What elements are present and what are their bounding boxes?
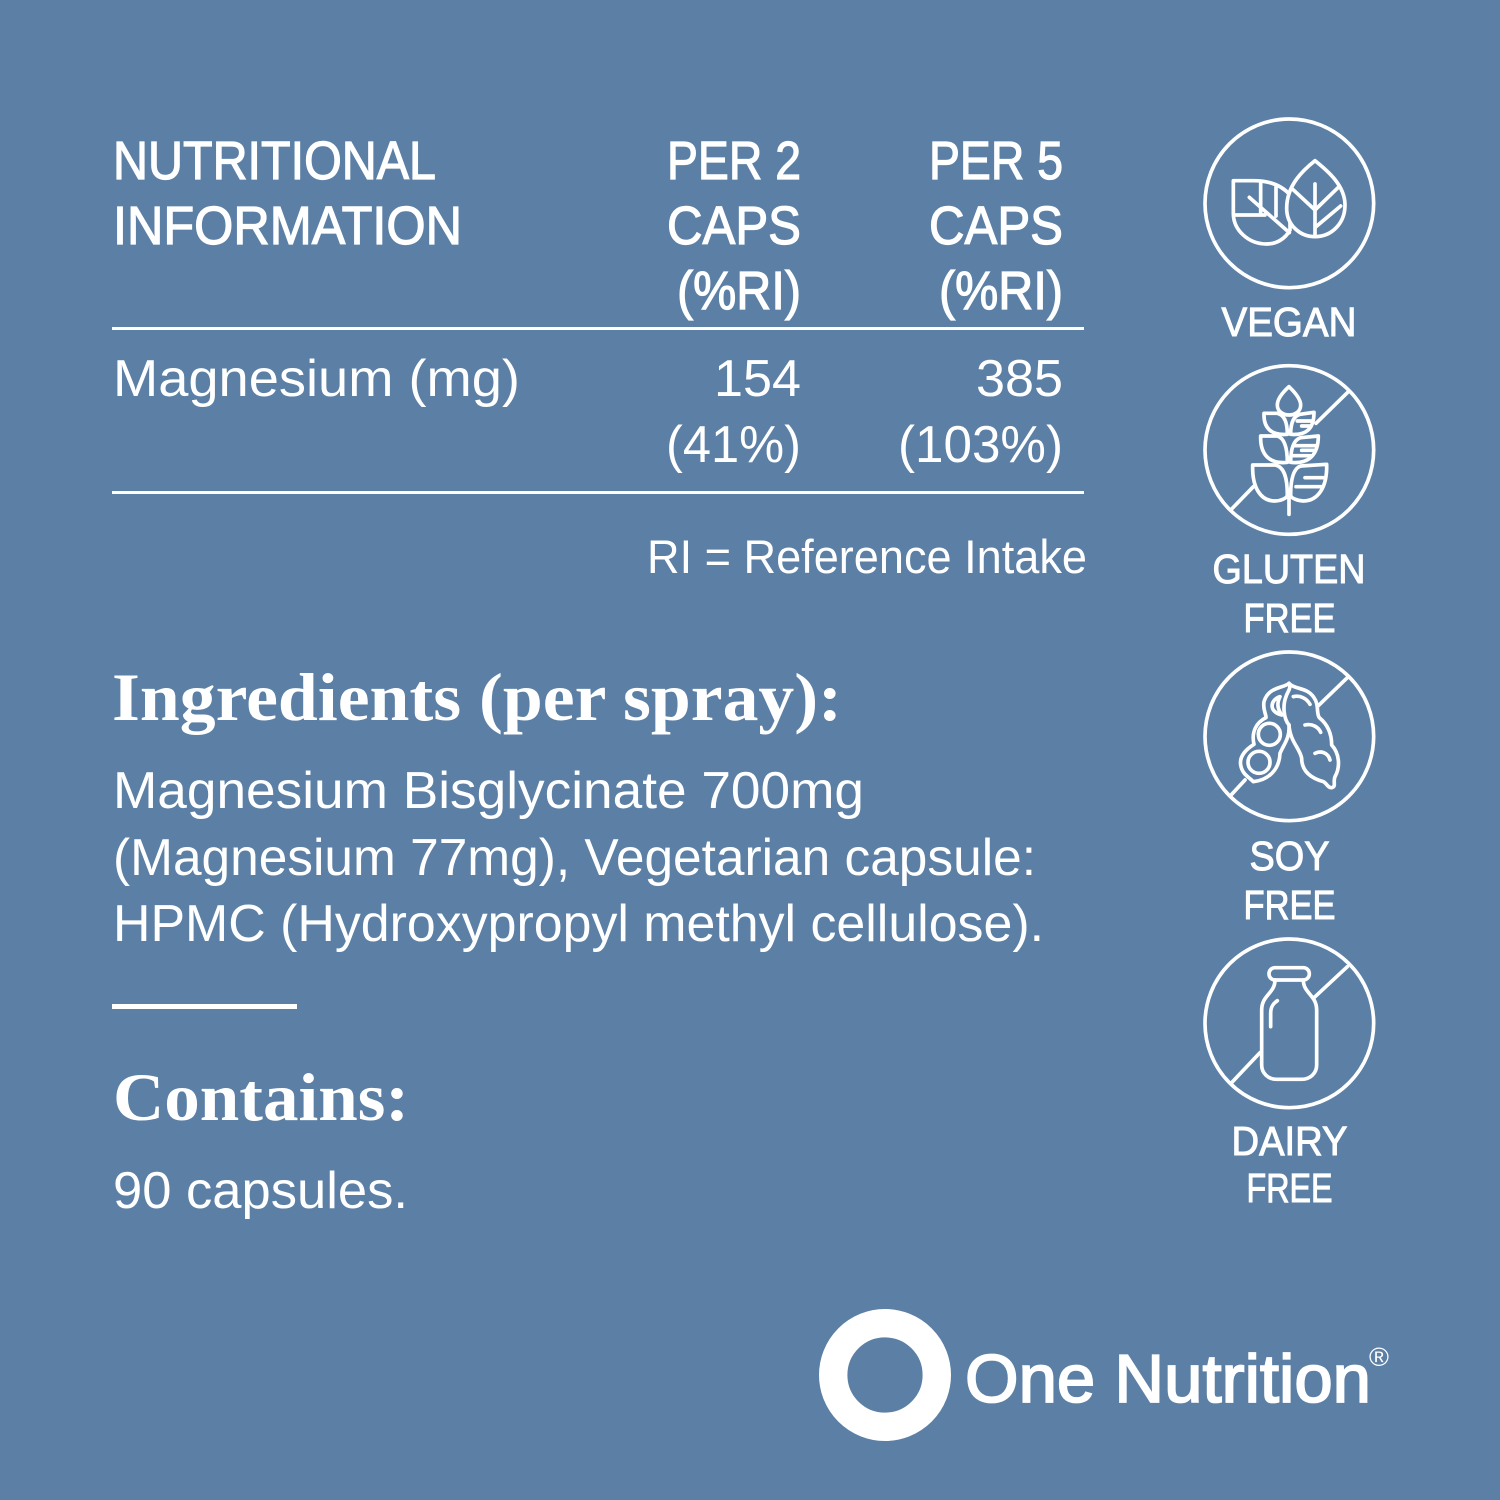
badge: vegan (1205, 119, 1374, 345)
value: per 2 caps: (41%) (666, 416, 801, 474)
column heading: per 5 caps: PER 5 (929, 131, 1063, 191)
text block: ingredients list: HPMC (Hydroxypropyl methyl cellulose). (113, 895, 1044, 953)
label: gluten free: FREE (1244, 595, 1336, 641)
value: per 5 caps (898, 350, 1063, 474)
column heading: per 2 caps (667, 131, 801, 321)
badge: dairy free (1205, 939, 1374, 1211)
table heading: nutritional information: INFORMATION (113, 196, 462, 256)
text block: capsule count: 90 capsules. (113, 1162, 408, 1220)
heading: contains: Contains: (113, 1059, 409, 1135)
wordmark: One Nutrition (965, 1341, 1371, 1417)
column heading: per 2 caps: PER 2 (667, 131, 801, 191)
icon: leaves (1205, 119, 1374, 288)
column heading: per 2 caps: (%RI) (677, 261, 801, 321)
value: per 5 caps: 385 (976, 350, 1063, 408)
badge: soy free (1205, 652, 1374, 928)
label: soy free (1244, 833, 1336, 928)
heading: ingredients: Ingredients (per spray): (112, 659, 842, 735)
row label: magnesium: Magnesium (mg) (113, 350, 520, 408)
text block: ingredients list: (Magnesium 77mg), Vegetarian capsule: (113, 829, 1036, 887)
value: per 5 caps: (103%) (898, 416, 1063, 474)
icon: logo ring (833, 1323, 937, 1427)
column heading: per 5 caps: CAPS (929, 196, 1063, 256)
value: per 2 caps: 154 (714, 350, 801, 408)
badge: gluten free (1205, 366, 1374, 641)
panel: nutritional information table (112, 131, 1087, 583)
label: dairy free: FREE (1246, 1165, 1332, 1211)
label: gluten free (1212, 546, 1366, 641)
footnote: reference intake: RI = Reference Intake (647, 530, 1087, 583)
text block: ingredients list (113, 762, 1044, 953)
table heading: nutritional information (113, 131, 462, 256)
icon: crossed wheat (1205, 366, 1374, 534)
label: gluten free: GLUTEN (1212, 546, 1366, 592)
label: dairy free (1232, 1118, 1348, 1211)
column heading: per 2 caps: CAPS (667, 196, 801, 256)
label: soy free: SOY (1250, 833, 1330, 879)
table heading: nutritional information: NUTRITIONAL (113, 131, 436, 191)
icon: crossed milk bottle (1205, 939, 1374, 1108)
label: vegan: VEGAN (1222, 299, 1356, 345)
value: per 2 caps (666, 350, 801, 474)
label: dairy free: DAIRY (1232, 1118, 1348, 1164)
icon: crossed soy pods (1205, 652, 1374, 821)
column heading: per 5 caps: (%RI) (939, 261, 1063, 321)
registered mark: ® (1369, 1342, 1389, 1372)
text block: ingredients list: Magnesium Bisglycinate 700mg (113, 762, 864, 820)
label: soy free: FREE (1244, 882, 1336, 928)
logo: one nutrition (833, 1323, 1389, 1427)
column heading: per 5 caps (929, 131, 1063, 321)
